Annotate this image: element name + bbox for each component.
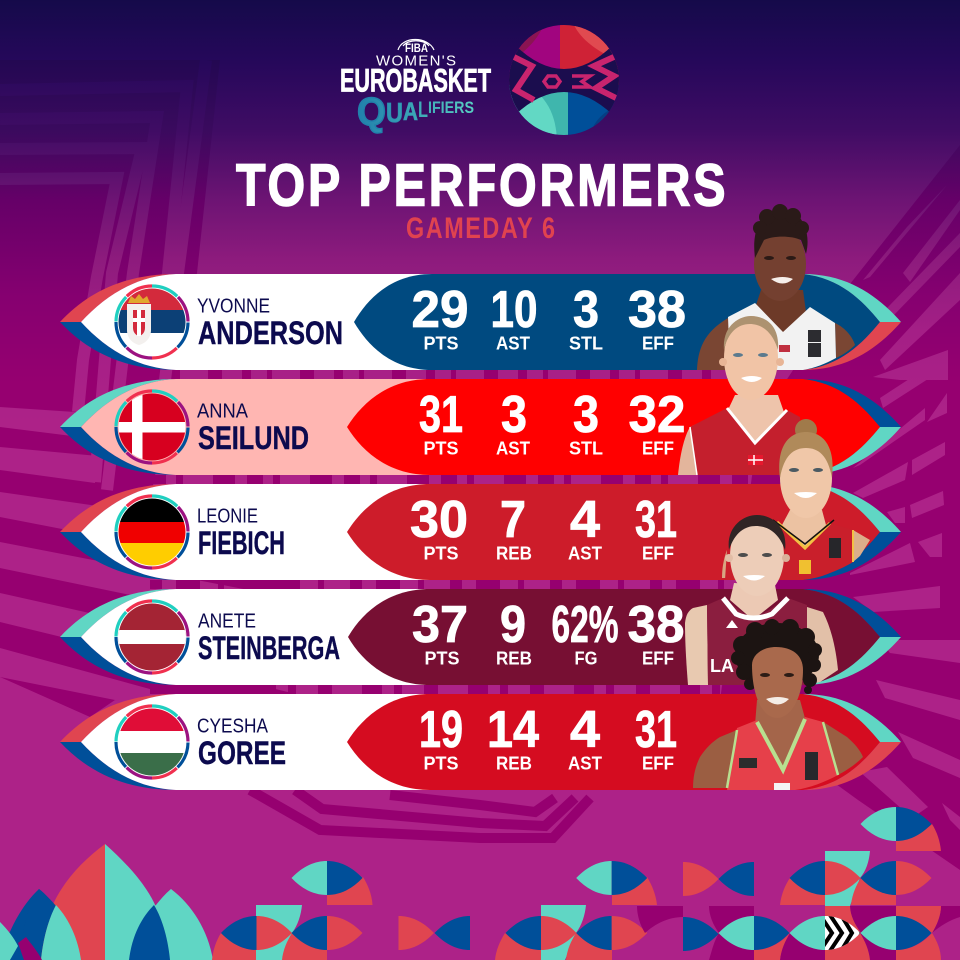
stats: Anna Seilund: STL: [569, 438, 603, 458]
stats: Anete Steinberga: PTS: [424, 648, 460, 668]
player photo: Yvonne Anderson: [697, 204, 855, 370]
stats: Yvonne Anderson: 10: [490, 281, 538, 339]
player photo: Anete Steinberga: [685, 515, 838, 685]
name: Cyesha Goree: [197, 716, 286, 771]
stats: Yvonne Anderson: STL: [569, 334, 603, 354]
stats: Anete Steinberga: [412, 596, 684, 668]
stats: Anna Seilund: 31: [419, 386, 463, 444]
QUALIFIERS wordmark: L: [418, 97, 428, 122]
row 4 banner: [60, 589, 901, 685]
decorative shapes: bottom-left leaves: [0, 844, 213, 960]
stats: Anete Steinberga: 37: [412, 596, 468, 654]
logo: basketball 2023 emblem: [509, 25, 619, 135]
FIBA arc mark: [398, 40, 434, 50]
name: Anete Steinberga: [198, 610, 340, 666]
QUALIFIERS wordmark: Q: [357, 90, 386, 134]
stats: Leonie Fiebich: 30: [410, 491, 468, 549]
stats: Yvonne Anderson: EFF: [642, 334, 674, 354]
stats: Leonie Fiebich: AST: [568, 544, 602, 564]
stats: Anete Steinberga: 38: [628, 596, 684, 654]
stats: Anna Seilund: 3: [573, 386, 599, 444]
stats: Anete Steinberga: 9: [500, 596, 526, 654]
stats: Anna Seilund: 3: [501, 386, 527, 444]
stats: Anna Seilund: 32: [628, 386, 686, 444]
WOMEN'S wordmark: WOMEN'S: [376, 52, 456, 70]
stats: Cyesha Goree: [419, 701, 677, 774]
decorative shapes: lens cluster right: [683, 807, 960, 960]
background pattern: lower chevrons: [250, 790, 590, 838]
decorative shapes: lens cluster centre: [495, 861, 754, 960]
stats: Cyesha Goree: 31: [635, 701, 677, 759]
stats: Leonie Fiebich: 7: [500, 491, 526, 549]
stats: Leonie Fiebich: 31: [635, 491, 677, 549]
name: Anna Seilund: SEILUND: [198, 420, 309, 456]
stats: Anete Steinberga: 62%: [552, 596, 618, 654]
name: Yvonne Anderson: YVONNE: [197, 296, 270, 318]
name: Anna Seilund: ANNA: [197, 400, 249, 422]
row: Leonie Fiebich: [60, 484, 901, 580]
emblem 2023 numerals: [512, 56, 616, 100]
stats: Cyesha Goree: 4: [570, 701, 600, 759]
stats: Leonie Fiebich: PTS: [424, 544, 458, 564]
player photo: Cyesha Goree: [693, 619, 863, 790]
stats: Leonie Fiebich: [410, 491, 677, 564]
name: Anete Steinberga: ANETE: [198, 610, 256, 632]
stats: Yvonne Anderson: 29: [412, 281, 468, 339]
row: Yvonne Anderson: [60, 274, 901, 370]
stats: Cyesha Goree: AST: [568, 754, 602, 774]
name: Leonie Fiebich: LEONIE: [197, 506, 258, 528]
name: Cyesha Goree: CYESHA: [197, 716, 269, 738]
stats: Yvonne Anderson: [412, 281, 686, 354]
row 2 banner: [60, 379, 901, 475]
emblem central band: [509, 48, 619, 112]
row 3 banner: [60, 484, 901, 580]
logo: FIBA Women's EuroBasket Qualifiers: [340, 40, 491, 134]
stats: Yvonne Anderson: PTS: [424, 334, 458, 354]
stats: Cyesha Goree: REB: [496, 754, 532, 774]
stats: Anete Steinberga: EFF: [642, 648, 674, 668]
name: Anete Steinberga: STEINBERGA: [198, 630, 340, 666]
background pattern: right burst: [720, 145, 960, 870]
background pattern: left chevrons: [0, 60, 300, 750]
flag: Serbia: [116, 286, 188, 358]
subtitle: GAMEDAY 6: [406, 211, 555, 245]
stats: Leonie Fiebich: REB: [496, 544, 532, 564]
row 1 banner: [60, 274, 901, 370]
player photo: Anna Seilund: [678, 316, 800, 475]
FIBA wordmark: FIBA: [405, 41, 428, 55]
row: Anete Steinberga: [60, 589, 901, 685]
stats: Anete Steinberga: FG: [574, 648, 598, 668]
stats: Yvonne Anderson: AST: [496, 334, 530, 354]
player photo: Anete Steinberga: LA: [710, 656, 734, 676]
QUALIFIERS wordmark: U: [386, 97, 403, 128]
decorative shapes: lens cluster left: [212, 861, 470, 960]
name: Anna Seilund: [197, 400, 309, 456]
EUROBASKET wordmark: EUROBASKET: [340, 62, 491, 98]
name: Yvonne Anderson: ANDERSON: [198, 315, 343, 351]
stats: Cyesha Goree: EFF: [642, 754, 674, 774]
icon: zebra lens: [825, 916, 860, 950]
row: Anna Seilund: [60, 379, 901, 475]
name: Cyesha Goree: GOREE: [198, 735, 286, 771]
row 5 banner: [60, 694, 901, 790]
flag: Hungary: [116, 706, 188, 778]
name: Yvonne Anderson: [197, 296, 343, 351]
stats: Leonie Fiebich: 4: [570, 491, 600, 549]
stats: Anete Steinberga: REB: [496, 648, 532, 668]
stats: Cyesha Goree: 14: [487, 701, 539, 759]
player photo: Leonie Fiebich: [722, 419, 870, 580]
stats: Anna Seilund: PTS: [424, 438, 458, 458]
name: Leonie Fiebich: FIEBICH: [198, 525, 285, 561]
QUALIFIERS wordmark: [357, 90, 474, 134]
stats: Anna Seilund: EFF: [642, 438, 674, 458]
stats: Anna Seilund: AST: [496, 438, 530, 458]
name: Leonie Fiebich: [197, 506, 285, 561]
flag: Denmark: [116, 391, 188, 463]
stats: Anna Seilund: [419, 386, 686, 458]
background pattern: stripes behind row gaps: [150, 374, 800, 690]
row: Cyesha Goree: [60, 694, 901, 790]
stats: Yvonne Anderson: 38: [628, 281, 686, 339]
stats: Yvonne Anderson: 3: [573, 281, 599, 339]
flag: Germany: [116, 496, 188, 568]
flag: Latvia: [116, 601, 188, 673]
QUALIFIERS wordmark: A: [403, 98, 418, 126]
stats: Cyesha Goree: 19: [419, 701, 463, 759]
stats: Cyesha Goree: PTS: [424, 754, 458, 774]
QUALIFIERS wordmark: IFIERS: [428, 98, 474, 117]
title: TOP PERFORMERS: [236, 153, 726, 219]
stats: Leonie Fiebich: EFF: [642, 544, 674, 564]
